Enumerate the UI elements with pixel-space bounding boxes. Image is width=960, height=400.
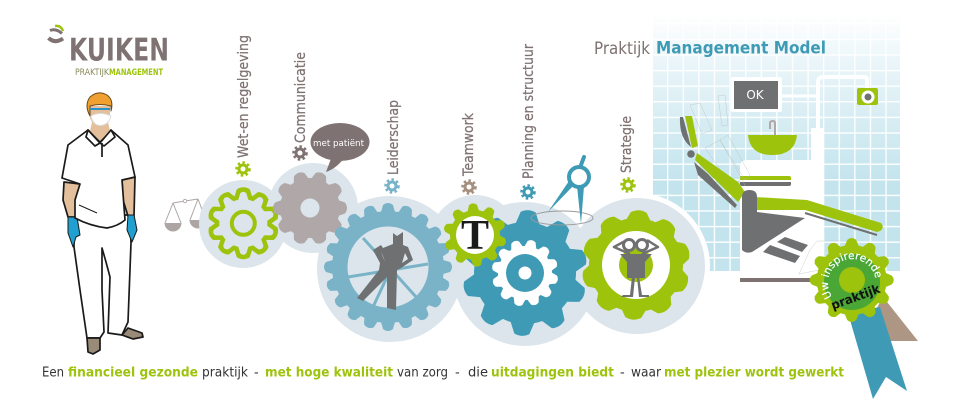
gear: Strategie [577, 207, 695, 323]
icon: compass [531, 157, 593, 225]
icon: figure looking through binoculars [614, 240, 658, 297]
gear: Teamwork [441, 201, 509, 269]
label: Communicatie: Communicatie [293, 52, 309, 143]
icon: hair [87, 93, 112, 116]
figure: dentist in white uniform with mask and gloves [62, 93, 143, 354]
icon: back rest [695, 153, 745, 202]
label: Wet-en regelgeving: Wet-en regelgeving [236, 35, 252, 158]
panel: tiled wall background [653, 15, 900, 271]
icon: small gear teal [522, 186, 534, 198]
icon: chair base [742, 190, 805, 253]
icon: left arm [63, 182, 80, 217]
icon: collar [86, 130, 115, 157]
icon: small gear lime [622, 179, 634, 191]
icon: protective glasses [90, 108, 110, 110]
text block: bottom slogan: Een [42, 366, 64, 380]
gear: Wet- en regelgeving [206, 187, 280, 259]
icon: teal ribbon tail [848, 307, 907, 399]
gear: Leiderschap [324, 203, 452, 331]
text block: bottom slogan [42, 366, 844, 380]
icon: floor bar [740, 278, 812, 282]
icon: foot steps [763, 237, 808, 263]
icon: small gear light blue [386, 180, 398, 192]
text block: bottom slogan: uitdagingen biedt [491, 366, 614, 380]
icon: scales [164, 199, 206, 232]
logo: Kuiken Praktijkmanagement: KUIKEN [69, 32, 169, 68]
gear: Teamwork: T [461, 213, 489, 259]
icon: seat [755, 197, 883, 232]
text block: bottom slogan: met hoge kwaliteit [265, 366, 393, 380]
gear backgrounds [199, 163, 705, 346]
icon: OK monitor [731, 77, 782, 112]
icon: headrest [685, 116, 698, 148]
icon: brown ribbon tail [870, 297, 918, 341]
label: Planning en structuur: Planning en structuur [521, 44, 537, 179]
logo: Kuiken Praktijkmanagement [48, 26, 169, 78]
icon: OK monitor: OK [746, 88, 765, 102]
icon: right arm [122, 177, 135, 216]
icon: face [90, 106, 110, 126]
icon: sink with faucet [748, 121, 797, 155]
icon: right glove [127, 215, 137, 242]
label: Strategie: Strategie [619, 116, 635, 173]
icon: leader figure pushing gear spoke [357, 232, 413, 310]
text block: bottom slogan: financieel gezonde [68, 366, 198, 380]
white halo around strategy gear [564, 193, 710, 339]
icon: trousers [74, 215, 131, 338]
icon: dental chair [680, 116, 883, 282]
text block: bottom slogan: waar [631, 366, 662, 380]
badge: Uw inspirerende praktijk rosette: Uw inspirerende [821, 253, 881, 300]
panel: dental cabinet [740, 77, 867, 271]
icon: ghost outlines of chair positions [690, 95, 860, 274]
icon: left shoe [87, 338, 100, 354]
icon: cabinet drawer stripes [740, 176, 791, 186]
text block: bottom slogan: die [468, 366, 488, 380]
icon: gear spokes [348, 238, 428, 307]
logo: Kuiken Praktijkmanagement: PRAKTIJK [75, 68, 110, 78]
gear: Communicatie [263, 161, 357, 255]
text block: bottom slogan: praktijk [202, 366, 248, 380]
icon: small gear brown [463, 181, 475, 193]
text block: bottom slogan: van zorg [397, 366, 448, 380]
text block: bottom slogan: met plezier wordt gewerkt [664, 366, 844, 380]
callout: met patiënt speech bubble: met patiënt [313, 139, 364, 149]
badge: Uw inspirerende praktijk rosette [810, 238, 894, 322]
icon: small gear green [237, 163, 249, 175]
text block: bottom slogan: - [254, 366, 259, 380]
icon: small gear dark [294, 147, 306, 159]
text block: bottom slogan: - [455, 366, 460, 380]
icon: green lamp box [857, 88, 878, 105]
label: Leiderschap: Leiderschap [386, 100, 402, 175]
logo: Kuiken Praktijkmanagement: MANAGEMENT [109, 68, 164, 78]
label: Teamwork: Teamwork [461, 112, 477, 177]
title [594, 38, 826, 59]
icon: right shoe [122, 328, 143, 339]
callout: met patiënt speech bubble [310, 123, 370, 172]
gear: Planning en structuur [458, 207, 592, 339]
icon: neck [90, 122, 110, 141]
icon: left glove [68, 217, 80, 247]
text block: bottom slogan: - [620, 366, 625, 380]
icon: shirt crease [79, 205, 97, 213]
badge: Uw inspirerende praktijk rosette: praktijk [829, 281, 883, 313]
icon: face mask [91, 114, 111, 126]
icon: polo shirt [62, 130, 135, 228]
title: Praktijk [594, 39, 650, 59]
title: Management Model [656, 38, 826, 58]
